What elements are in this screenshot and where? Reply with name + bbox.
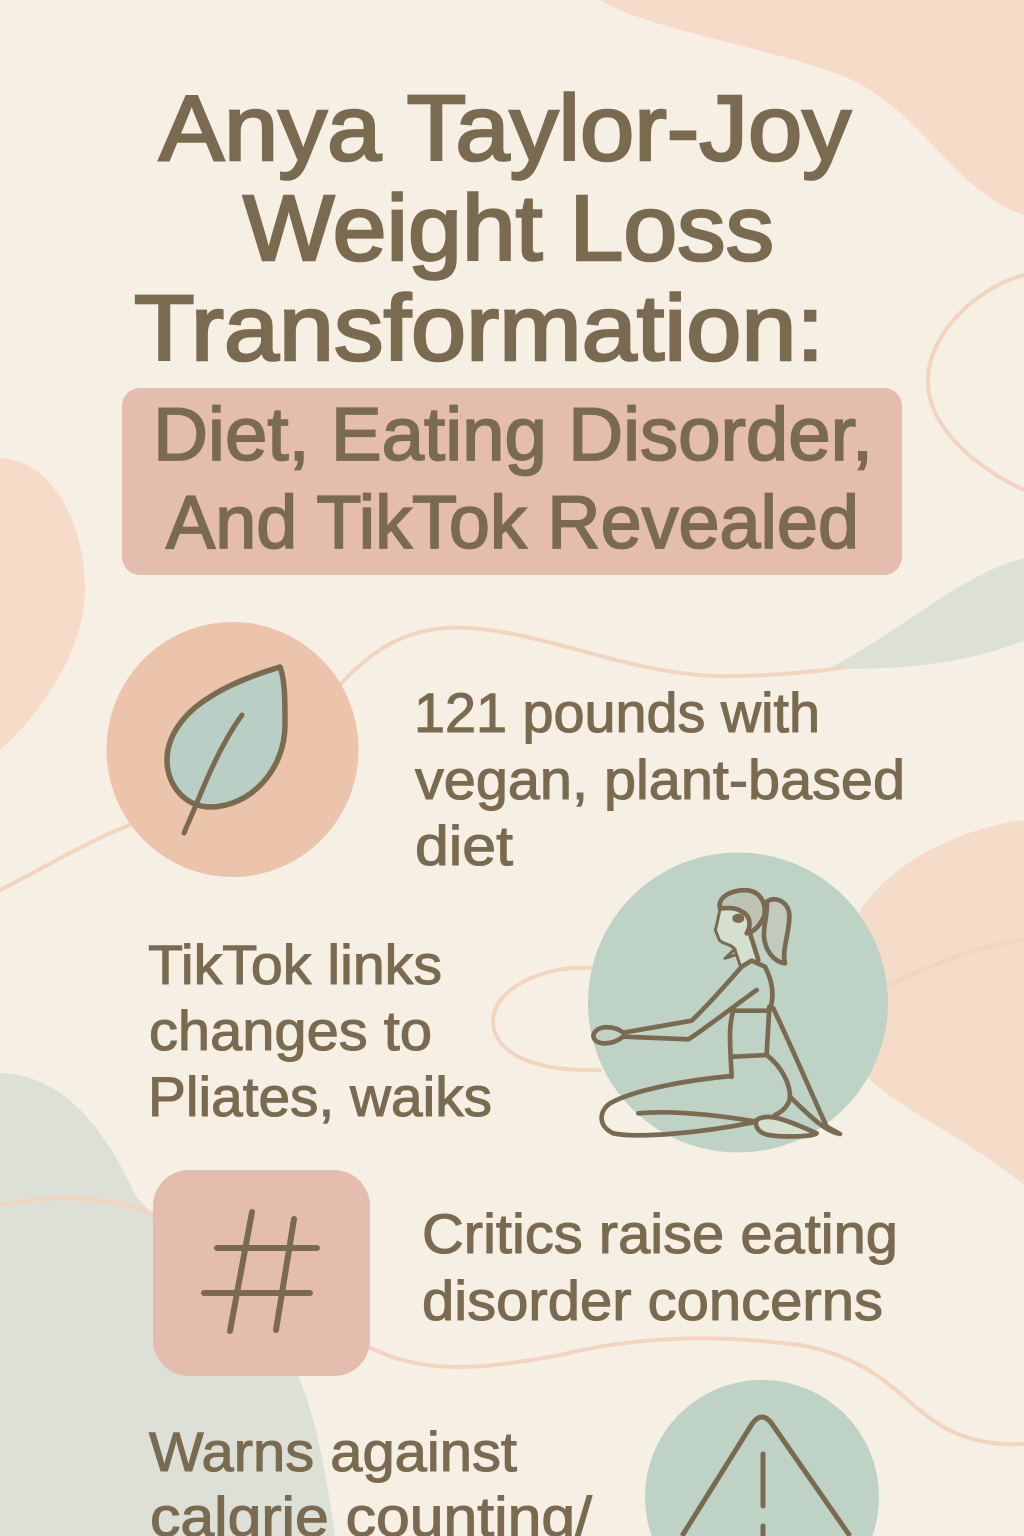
text: calorie warning: [149, 1420, 592, 1536]
text: vegan diet: [414, 681, 905, 877]
text: calorie warning: Warns against: [149, 1420, 517, 1483]
title: Anya Taylor-Joy: [159, 76, 852, 180]
text: tiktok links: changes to: [149, 999, 432, 1062]
icon: seated yoga figure: [588, 852, 888, 1152]
text: tiktok links: TikTok links: [148, 933, 442, 996]
title: Transformation:: [134, 276, 824, 380]
text: vegan diet: diet: [415, 814, 513, 877]
text: critics concerns: [422, 1202, 898, 1332]
icon: leaf: [106, 622, 358, 877]
icon: hashtag: [153, 1170, 370, 1376]
title: Weight Loss: [243, 176, 774, 280]
subtitle banner: And TikTok Revealed: [166, 480, 859, 564]
text: vegan diet: 121 pounds with: [414, 681, 820, 744]
text: critics concerns: disorder concerns: [422, 1269, 883, 1332]
subtitle banner: Diet, Eating Disorder,: [153, 392, 873, 476]
text: tiktok links: Pliates, waiks: [148, 1065, 492, 1128]
icon: warning triangle: [645, 1380, 879, 1536]
text: tiktok links: [148, 933, 492, 1128]
subtitle banner: [122, 388, 902, 575]
text: vegan diet: vegan, plant-based: [415, 748, 905, 811]
title: [134, 76, 852, 380]
text: critics concerns: Critics raise eating: [422, 1202, 898, 1265]
